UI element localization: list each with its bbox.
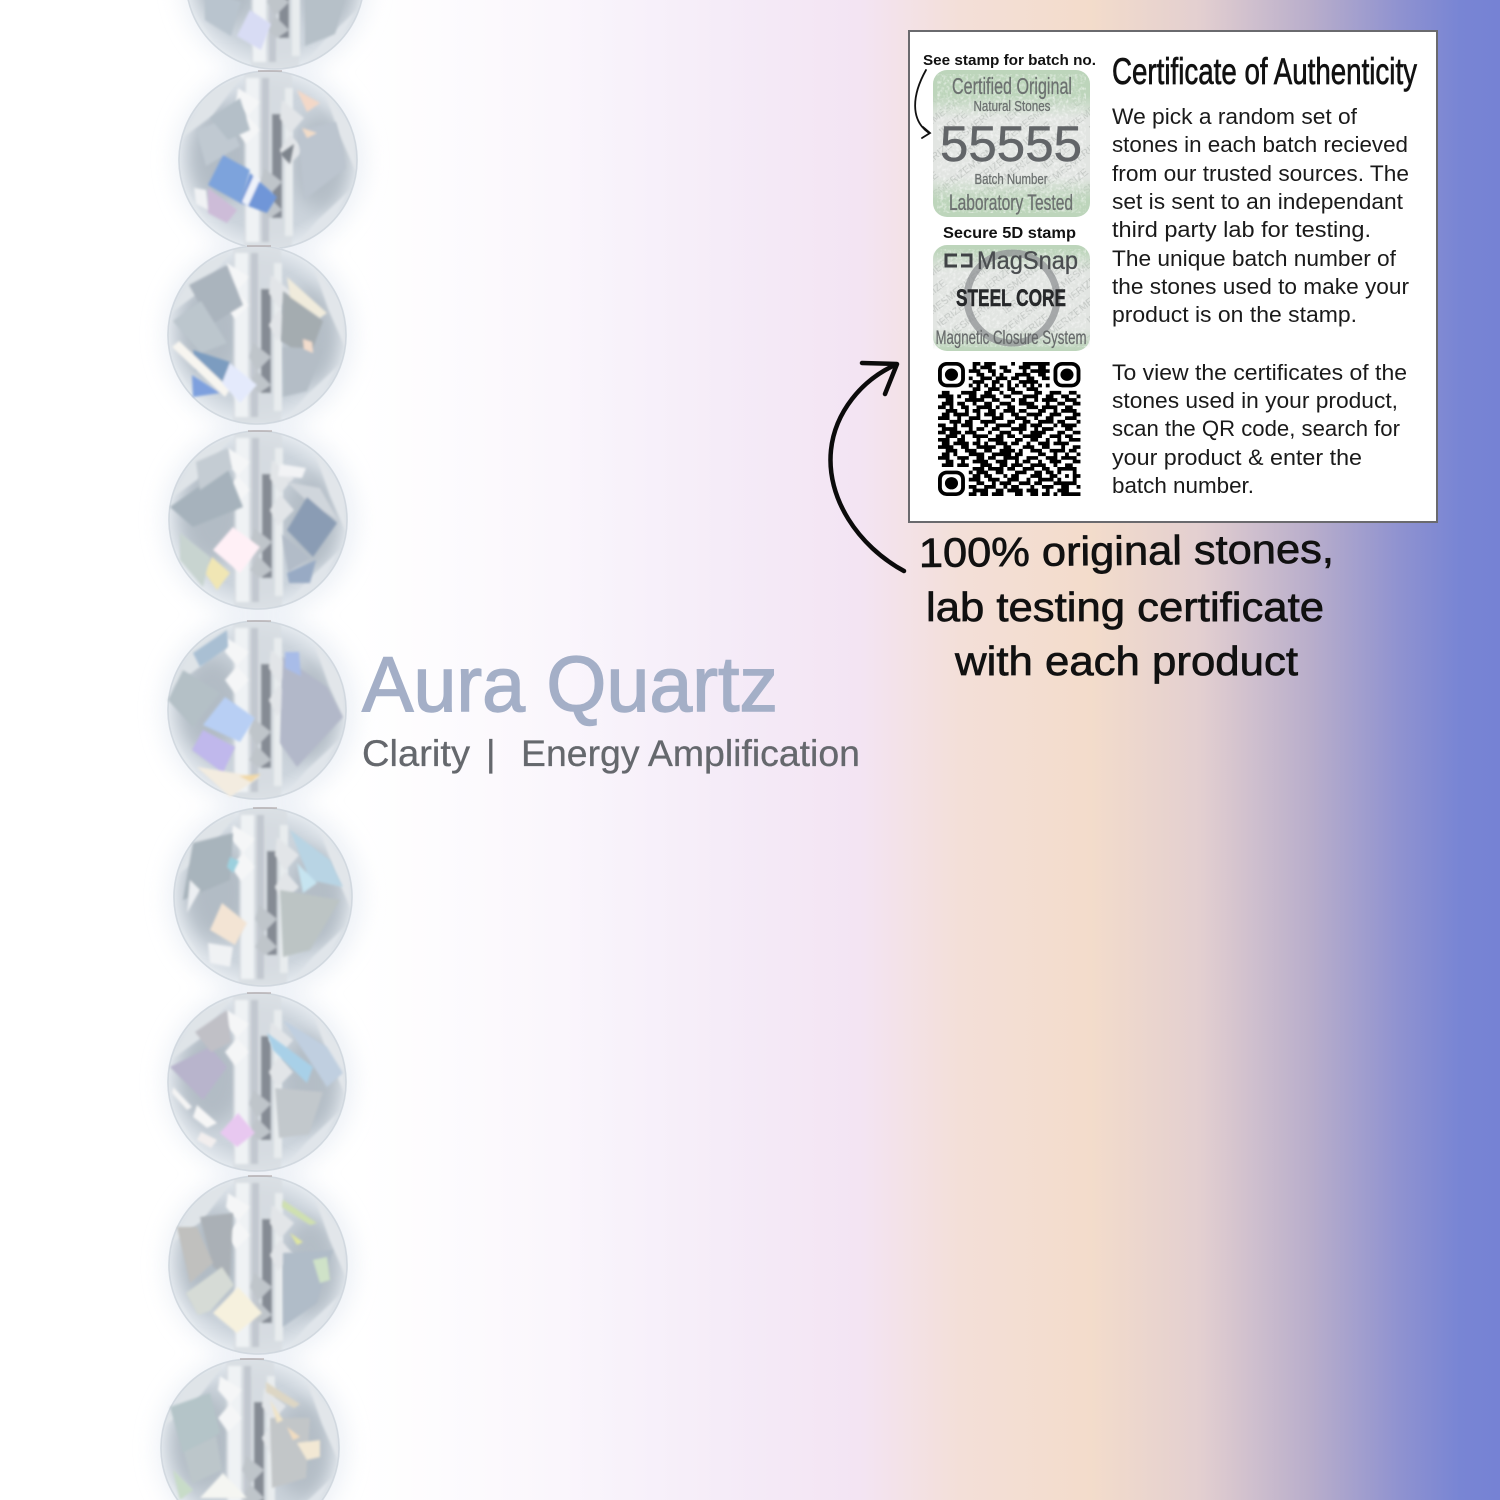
bead 6 — [173, 807, 353, 987]
stamp: certified original batch number: Batch Number — [974, 171, 1048, 188]
text block: certificate description: stones in each batch recieved — [1112, 132, 1408, 157]
callout: original stones statement: lab testing certificate — [926, 584, 1324, 630]
text block: QR instructions: batch number. — [1112, 473, 1254, 498]
stamp: certified original batch number: 55555 — [940, 116, 1082, 172]
text block: certificate description: the stones used to make your — [1112, 274, 1409, 299]
icon: small curved arrow to stamp — [915, 70, 930, 138]
bead 5 — [167, 620, 347, 800]
callout: original stones statement: 100% original stones, — [919, 526, 1334, 576]
stamp: magsnap steel core: MagSnap — [977, 247, 1078, 275]
icon: magsnap logo — [946, 255, 971, 266]
bead 4 — [168, 430, 348, 610]
bead 8 — [168, 1175, 348, 1355]
text block: certificate description: We pick a random set of — [1112, 104, 1358, 129]
text block: QR instructions — [1112, 360, 1407, 498]
text block: certificate description: product is on the stamp. — [1112, 302, 1357, 327]
stamp: certified original batch number: Laboratory Tested — [949, 190, 1073, 215]
stamp caption 2: Secure 5D stamp — [943, 225, 1076, 242]
text block: certificate description: from our trusted sources. The — [1112, 161, 1409, 186]
bead 1 — [185, 0, 365, 70]
stamp: magsnap steel core: STEEL CORE — [956, 285, 1066, 312]
stamp: certified original batch number: Natural Stones — [974, 98, 1050, 115]
stamp caption: See stamp for batch no. — [923, 53, 1096, 69]
text block: certificate description: The unique batch number of — [1112, 246, 1397, 271]
bead 7 — [167, 992, 347, 1172]
text block: certificate description — [1112, 104, 1409, 327]
title: Aura Quartz: Aura Quartz — [362, 640, 778, 728]
bead 3 — [167, 245, 347, 425]
text block: QR instructions: To view the certificates of the — [1112, 360, 1407, 385]
text block: QR instructions: your product & enter the — [1112, 445, 1362, 470]
subtitle: properties — [362, 733, 860, 774]
stamp: certified original batch number — [933, 70, 1090, 217]
subtitle: properties: Energy Amplification — [521, 733, 860, 774]
stamp: magsnap steel core — [933, 245, 1090, 351]
text block: certificate description: third party lab for testing. — [1112, 217, 1371, 242]
panel: certificate card — [909, 31, 1437, 522]
bead 2 — [178, 70, 358, 250]
text block: QR instructions: stones used in your product, — [1112, 388, 1398, 413]
stamp: certified original batch number: Certified Original — [952, 73, 1072, 99]
text block: certificate description: set is sent to an independant — [1112, 189, 1403, 214]
bead 9 — [160, 1358, 340, 1500]
callout: original stones statement: with each product — [954, 638, 1299, 684]
arrow: callout to certificate — [830, 363, 904, 571]
text block: QR instructions: scan the QR code, search for — [1112, 416, 1400, 441]
QR code — [938, 364, 1080, 494]
subtitle: properties: | — [486, 733, 496, 774]
strand shadow — [156, 0, 371, 1500]
stamp: magsnap steel core: Magnetic Closure System — [936, 328, 1086, 349]
callout: original stones statement — [919, 526, 1334, 684]
bead strand — [156, 0, 371, 1500]
subtitle: properties: Clarity — [362, 733, 471, 774]
